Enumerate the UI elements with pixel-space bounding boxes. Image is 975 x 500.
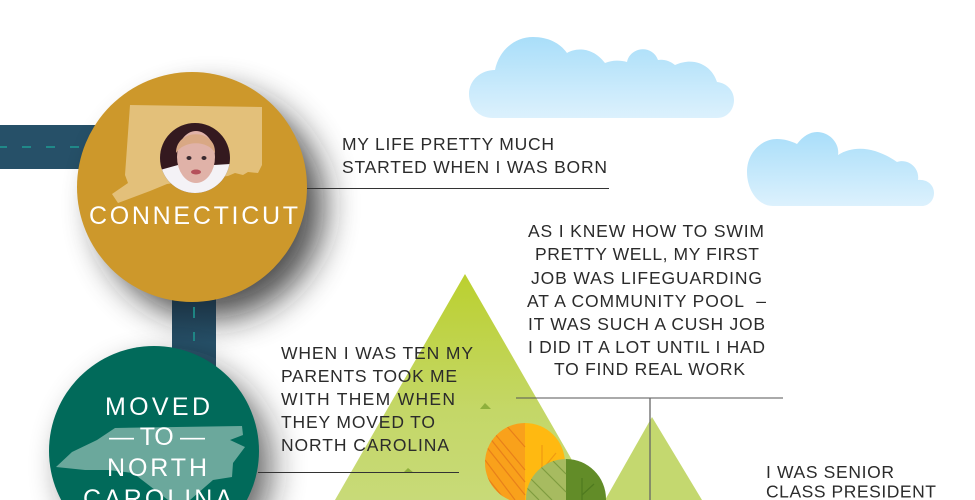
leader line: North Carolina (258, 472, 459, 474)
shadow: North Carolina circle (65, 363, 271, 500)
state shape: North Carolina (56, 426, 245, 500)
label: Connecticut: CONNECTICUT (89, 202, 298, 230)
mountain: small (605, 417, 702, 500)
text: moved to North Carolina (281, 343, 473, 455)
leader line: Connecticut (307, 188, 609, 190)
text: moved to North Carolina: THEY MOVED TO (281, 412, 435, 432)
cloud: large (469, 37, 734, 118)
tree: orange (485, 423, 566, 500)
mountain: large (335, 274, 595, 500)
photo: baby (160, 123, 230, 195)
text: class president (766, 462, 936, 500)
label: moved: MOVED (105, 393, 210, 421)
text: born: STARTED WHEN I WAS BORN (342, 157, 607, 177)
road: horizontal (0, 125, 100, 169)
text: born (342, 134, 607, 177)
state shape: Connecticut (112, 105, 262, 203)
text: lifeguard job: TO FIND REAL WORK (554, 359, 745, 379)
text: lifeguard job: JOB WAS LIFEGUARDING (531, 268, 762, 288)
small tree marker lower (403, 468, 414, 473)
label: to: — TO — (109, 423, 205, 451)
text: moved to North Carolina: WITH THEM WHEN (281, 389, 455, 409)
text: moved to North Carolina: PARENTS TOOK ME (281, 366, 457, 386)
text: lifeguard job: I DID IT A LOT UNTIL I HAD (528, 337, 765, 357)
text: lifeguard job: AT A COMMUNITY POOL – (527, 291, 766, 311)
text: lifeguard job (527, 221, 766, 379)
tree: green (526, 459, 606, 500)
leader line: lifeguard (516, 398, 783, 500)
text: born: MY LIFE PRETTY MUCH (342, 134, 554, 154)
shadow: Connecticut circle (98, 93, 324, 319)
circle: Connecticut (77, 72, 307, 302)
text: lifeguard job: AS I KNEW HOW TO SWIM (528, 221, 764, 241)
label: north: NORTH (107, 454, 207, 482)
text: moved to North Carolina: NORTH CAROLINA (281, 435, 449, 455)
text: lifeguard job: IT WAS SUCH A CUSH JOB (528, 314, 765, 334)
text: lifeguard job: PRETTY WELL, MY FIRST (535, 244, 759, 264)
text: moved to North Carolina: WHEN I WAS TEN MY (281, 343, 473, 363)
circle: North Carolina (49, 346, 259, 500)
cloud: small (747, 132, 934, 206)
small tree marker upper (480, 403, 491, 409)
road: vertical (172, 295, 216, 375)
text: class president: I WAS SENIOR (766, 462, 894, 482)
